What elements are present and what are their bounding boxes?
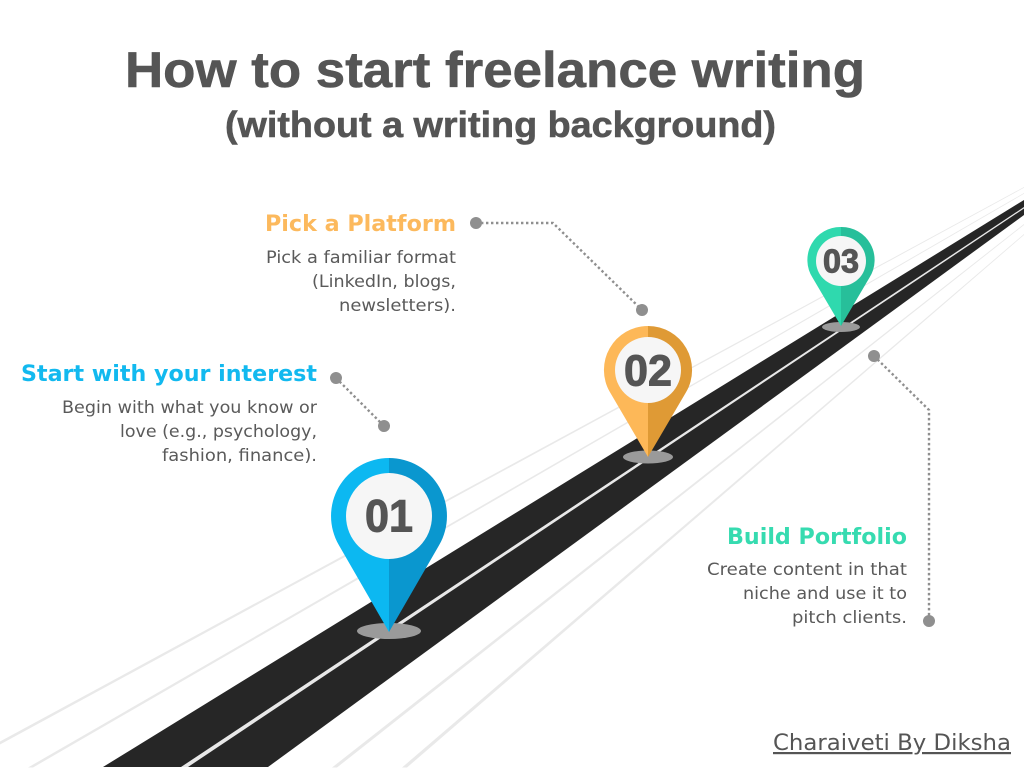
pin 03 <box>807 227 875 332</box>
text block: step 2 <box>265 211 457 315</box>
title: How to start freelance writing <box>125 42 865 98</box>
text block: step 3: Create content in that <box>707 560 908 579</box>
credit: Charaiveti By Diksha <box>773 731 1011 756</box>
pin 02 <box>604 326 692 464</box>
text block: step 2: Pick a Platform <box>265 211 456 237</box>
pin 01: 01 <box>365 490 413 542</box>
text block: step 1: Start with your interest <box>21 361 317 387</box>
text block: step 3 <box>707 524 908 627</box>
text block: step 1 <box>21 361 317 465</box>
subtitle: (without a writing background) <box>225 104 776 145</box>
pin 03: 03 <box>823 242 859 280</box>
pin 01 <box>331 458 447 639</box>
text block: step 2: Pick a familiar format <box>266 248 457 267</box>
text block: step 3: Build Portfolio <box>727 524 907 550</box>
connector: step 2 <box>470 217 648 316</box>
text block: step 1: love (e.g., psychology, <box>120 422 317 441</box>
pin 02: 02 <box>624 346 672 396</box>
text block: step 3: pitch clients. <box>792 608 907 627</box>
connector: step 3 <box>868 350 935 627</box>
perspective guide lines <box>0 187 1024 768</box>
text block: step 1: fashion, finance). <box>162 446 317 465</box>
text block: step 2: newsletters). <box>339 296 456 315</box>
road <box>103 200 1024 767</box>
text block: step 3: niche and use it to <box>743 584 907 603</box>
text block: step 1: Begin with what you know or <box>62 398 317 417</box>
connector: step 1 <box>330 372 390 432</box>
text block: step 2: (LinkedIn, blogs, <box>312 272 456 291</box>
